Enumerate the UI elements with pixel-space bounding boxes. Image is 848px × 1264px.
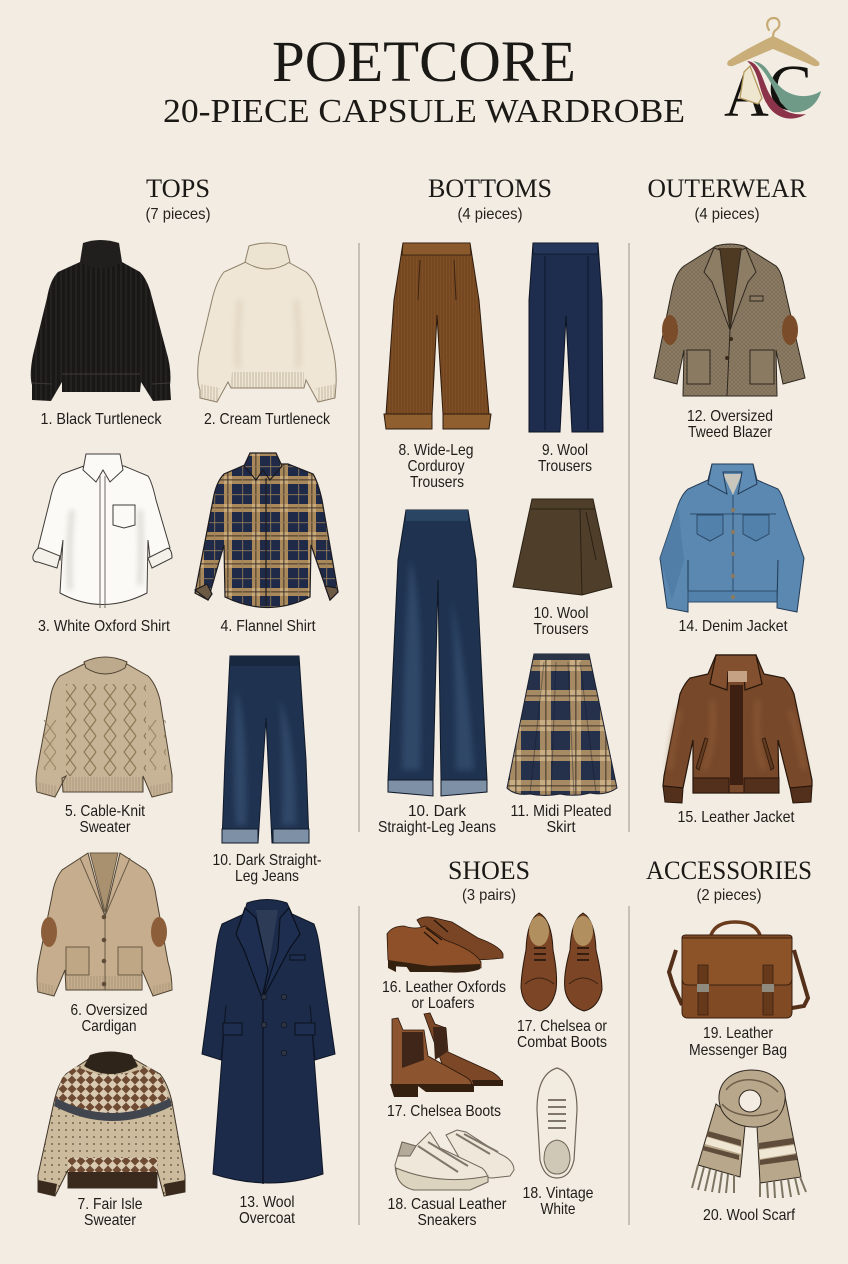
label: 17. Chelsea Boots (387, 1103, 501, 1120)
label: Tweed Blazer (688, 424, 773, 441)
label (378, 803, 496, 836)
label: 2. Cream Turtleneck (204, 411, 331, 428)
label: 12. Oversized (687, 408, 773, 425)
item: dark straight-leg jeans (222, 656, 309, 843)
label: 14. Denim Jacket (678, 618, 788, 635)
label: Sweater (80, 819, 131, 836)
heading: shoes: (3 pairs) (462, 887, 516, 904)
label: 19. Leather (703, 1025, 774, 1042)
item: dark straight-leg jeans large (388, 510, 487, 796)
item: wool overcoat (202, 900, 335, 1184)
heading: tops (146, 174, 210, 223)
label: Skirt (546, 819, 576, 836)
item: denim jacket (660, 464, 804, 612)
label: Corduroy (408, 458, 464, 475)
item: leather jacket (663, 655, 812, 803)
heading: shoes (448, 856, 530, 904)
label: Sneakers (418, 1212, 476, 1229)
label (687, 408, 773, 441)
label: 6. Oversized (70, 1002, 148, 1019)
label: 16. Leather Oxfords (382, 979, 506, 996)
item: oversized tweed blazer (654, 244, 805, 396)
item: flannel shirt (195, 453, 338, 608)
item: casual leather sneakers (395, 1130, 514, 1190)
item: wool skirt (513, 499, 612, 595)
item: wide-leg corduroy trousers (384, 243, 491, 429)
label (212, 852, 322, 885)
item: cable-knit sweater (36, 657, 172, 797)
heading: tops: (7 pieces) (146, 206, 210, 223)
label: 7. Fair Isle (78, 1196, 143, 1213)
heading: bottoms (428, 174, 552, 223)
label: 4. Flannel Shirt (220, 618, 316, 635)
label (689, 1025, 787, 1059)
title: POETCORE (272, 29, 576, 94)
logo: hanger with AC monogram: C (768, 52, 812, 125)
item: black turtleneck (31, 240, 171, 401)
label (398, 442, 474, 491)
label: Trousers (534, 621, 588, 638)
item: top-view shoes (521, 913, 602, 1011)
label: 10. Dark Straight- (212, 852, 322, 869)
label: 8. Wide-Leg (398, 442, 474, 459)
label: Trousers (410, 474, 464, 491)
label: 10. Wool (534, 605, 588, 622)
item: wool trousers navy (529, 243, 603, 432)
label: 18. Casual Leather (388, 1196, 507, 1213)
label (388, 1196, 507, 1229)
heading: accessories: ACCESSORIES (646, 856, 812, 885)
item: wool scarf (692, 1070, 806, 1198)
item: chelsea boots (390, 1013, 503, 1097)
heading: accessories: (2 pieces) (696, 887, 762, 904)
column dividers (359, 243, 629, 1225)
item: vintage white sneaker (537, 1068, 577, 1178)
label: 9. Wool (542, 442, 588, 459)
heading: accessories (646, 856, 812, 904)
label: White (540, 1201, 576, 1218)
label: Trousers (538, 458, 592, 475)
label: Sweater (84, 1212, 137, 1229)
label: 5. Cable-Knit (65, 803, 145, 820)
heading: tops: TOPS (146, 174, 210, 203)
title: 20-PIECE CAPSULE WARDROBE (163, 93, 685, 130)
label (510, 803, 612, 836)
panel: shoes (382, 856, 608, 1229)
label: 3. White Oxford Shirt (38, 618, 170, 635)
title (163, 29, 685, 130)
heading: outerwear: OUTERWEAR (648, 174, 807, 203)
panel: bottoms (378, 174, 617, 836)
label: 11. Midi Pleated (510, 803, 612, 820)
heading: outerwear: (4 pieces) (694, 206, 760, 223)
label: 15. Leather Jacket (678, 809, 795, 826)
panel: outerwear (648, 174, 812, 826)
label: 18. Vintage (522, 1185, 594, 1202)
label (382, 979, 506, 1012)
label (239, 1194, 295, 1227)
label: 17. Chelsea or (517, 1018, 608, 1035)
item: oversized cardigan (37, 853, 172, 996)
label: Cardigan (82, 1018, 136, 1035)
heading: bottoms: BOTTOMS (428, 174, 552, 203)
item: midi pleated skirt (507, 654, 617, 796)
label: Messenger Bag (689, 1042, 787, 1059)
label (522, 1185, 594, 1218)
item: cream turtleneck (198, 243, 336, 402)
label: 1. Black Turtleneck (40, 411, 162, 428)
label: Overcoat (239, 1210, 295, 1227)
panel: tops (31, 174, 338, 1229)
label: 20. Wool Scarf (703, 1207, 795, 1224)
panel: accessories (646, 856, 812, 1224)
heading: outerwear (648, 174, 807, 223)
label (517, 1018, 608, 1051)
label: 10. Dark (408, 803, 467, 820)
label: Leg Jeans (235, 868, 299, 885)
label (534, 605, 588, 638)
item: leather messenger bag (669, 922, 808, 1018)
label (65, 803, 145, 836)
heading: shoes: SHOES (448, 856, 530, 885)
item: leather oxfords (387, 917, 503, 973)
label (70, 1002, 148, 1035)
label: Combat Boots (517, 1034, 607, 1051)
item: fair isle sweater (38, 1052, 185, 1196)
logo: hanger with AC monogram: A (724, 62, 769, 130)
item: white oxford shirt (33, 454, 172, 608)
label (538, 442, 592, 475)
heading: bottoms: (4 pieces) (458, 206, 522, 223)
label: or Loafers (412, 995, 474, 1012)
label: Straight-Leg Jeans (378, 819, 496, 836)
label: 13. Wool (240, 1194, 294, 1211)
label (78, 1196, 143, 1229)
logo: hanger with AC monogram (724, 18, 821, 130)
